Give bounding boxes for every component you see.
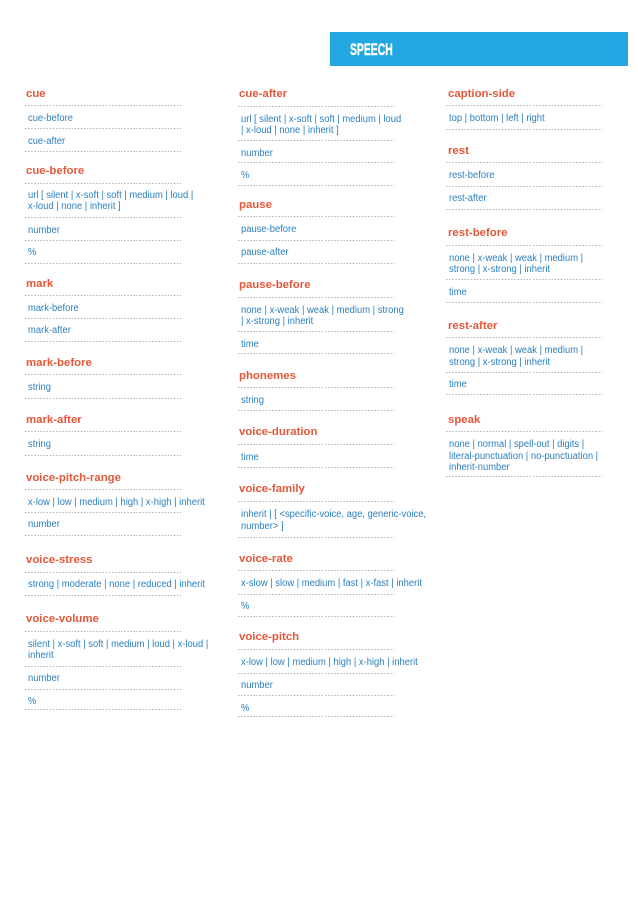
section: voice-family: number> ]: [241, 520, 284, 532]
section: phonemes: string: [241, 395, 264, 406]
section: cue: cue-after: [28, 136, 65, 147]
section: mark: mark-before: [28, 303, 79, 314]
section: cue: cue: [26, 88, 46, 100]
section: voice-pitch-range: [25, 472, 205, 536]
section: speak: [446, 414, 602, 477]
section: speak: inherit-number: [449, 462, 510, 473]
section: voice-pitch: %: [241, 703, 249, 714]
section: voice-pitch-range: number: [28, 519, 60, 530]
section: cue-before: url [ silent | x-soft | soft | medium | loud |: [28, 190, 193, 201]
section: cue-before: number: [28, 225, 60, 236]
section: voice-rate: x-slow | slow | medium | fast | x-fast | inherit: [241, 578, 422, 589]
section: voice-pitch: [238, 631, 418, 717]
section: mark-after: string: [28, 439, 51, 450]
section: voice-rate: %: [241, 601, 249, 612]
section: voice-pitch: voice-pitch: [239, 631, 299, 643]
section: rest-after: none | x-weak | weak | medium |: [449, 345, 583, 356]
section: voice-pitch-range: voice-pitch-range: [26, 472, 121, 484]
section: cue: cue-before: [28, 113, 73, 124]
section: cue-after: [238, 88, 401, 186]
section: voice-duration: voice-duration: [239, 426, 317, 438]
section: speak: literal-punctuation | no-punctuation |: [449, 450, 598, 462]
section: voice-pitch: x-low | low | medium | high | x-high | inherit: [241, 657, 418, 668]
section: rest-before: none | x-weak | weak | medium |: [449, 253, 583, 264]
section: caption-side: [446, 88, 602, 130]
section: cue-before: %: [28, 247, 36, 258]
banner: speech: [330, 32, 628, 66]
section: voice-volume: silent | x-soft | soft | medium | loud | x-loud |: [28, 639, 208, 650]
section: rest-before: strong | x-strong | inherit: [449, 264, 550, 275]
section: voice-stress: voice-stress: [26, 554, 92, 566]
section: voice-family: [238, 483, 426, 538]
section: voice-pitch: number: [241, 680, 273, 691]
section: cue-after: %: [241, 170, 249, 181]
section: voice-stress: [25, 554, 205, 596]
section: cue-after: cue-after: [239, 88, 287, 100]
banner title: SPEECH: [350, 41, 393, 59]
section: caption-side: caption-side: [448, 88, 515, 100]
section: rest: rest-before: [449, 170, 494, 181]
section: voice-pitch-range: x-low | low | medium | high | x-high | inherit: [28, 497, 205, 508]
section: rest-after: strong | x-strong | inherit: [449, 356, 550, 368]
section: pause-before: [238, 279, 404, 354]
section: mark: [25, 278, 181, 342]
section: voice-rate: [238, 553, 422, 617]
section: rest: rest: [448, 145, 469, 157]
section: mark-before: [25, 357, 181, 399]
section: pause-before: time: [241, 339, 259, 350]
section: voice-family: voice-family: [239, 483, 305, 495]
section: pause: [238, 199, 394, 264]
section: voice-family: inherit | [ <specific-voice, age, generic-voice,: [241, 509, 426, 520]
section: mark-before: string: [28, 382, 51, 393]
section: pause-before: | x-strong | inherit: [241, 316, 313, 327]
section: voice-volume: number: [28, 673, 60, 684]
section: voice-volume: %: [28, 696, 36, 707]
section: mark-after: mark-after: [26, 414, 82, 426]
section: pause: pause: [239, 199, 272, 211]
section: speak: none | normal | spell-out | digits |: [449, 439, 584, 450]
section: rest-after: rest-after: [448, 320, 497, 332]
section: mark-before: mark-before: [26, 357, 92, 369]
section: pause: pause-after: [241, 247, 289, 258]
section: mark-after: [25, 414, 181, 456]
section: voice-volume: inherit: [28, 650, 54, 661]
section: rest: [446, 145, 602, 210]
section: caption-side: top | bottom | left | right: [449, 113, 545, 124]
section: rest-before: rest-before: [448, 227, 508, 239]
section: voice-stress: strong | moderate | none | reduced | inherit: [28, 579, 205, 590]
section: pause: pause-before: [241, 224, 296, 235]
section: mark: mark-after: [28, 325, 71, 336]
section: phonemes: phonemes: [239, 370, 296, 382]
section: rest: rest-after: [449, 193, 487, 204]
section: voice-rate: voice-rate: [239, 553, 293, 565]
section: cue-after: url [ silent | x-soft | soft | medium | loud: [241, 114, 401, 125]
section: phonemes: [238, 370, 394, 411]
section: rest-after: time: [449, 379, 467, 390]
section: pause-before: none | x-weak | weak | medium | strong: [241, 305, 404, 316]
section: cue: [25, 88, 181, 152]
section: voice-volume: [25, 613, 208, 710]
section: cue-after: | x-loud | none | inherit ]: [241, 125, 339, 136]
section: voice-duration: [238, 426, 394, 468]
section: rest-after: [446, 320, 602, 395]
section: cue-before: cue-before: [26, 165, 84, 177]
section: rest-before: time: [449, 287, 467, 298]
section: voice-duration: time: [241, 452, 259, 463]
section: pause-before: pause-before: [239, 279, 311, 291]
section: cue-before: x-loud | none | inherit ]: [28, 201, 121, 212]
section: mark: mark: [26, 278, 53, 290]
section: voice-volume: voice-volume: [26, 613, 99, 625]
section: cue-before: [25, 165, 193, 264]
section: speak: speak: [448, 414, 480, 426]
section: cue-after: number: [241, 148, 273, 159]
section: rest-before: [446, 227, 602, 303]
